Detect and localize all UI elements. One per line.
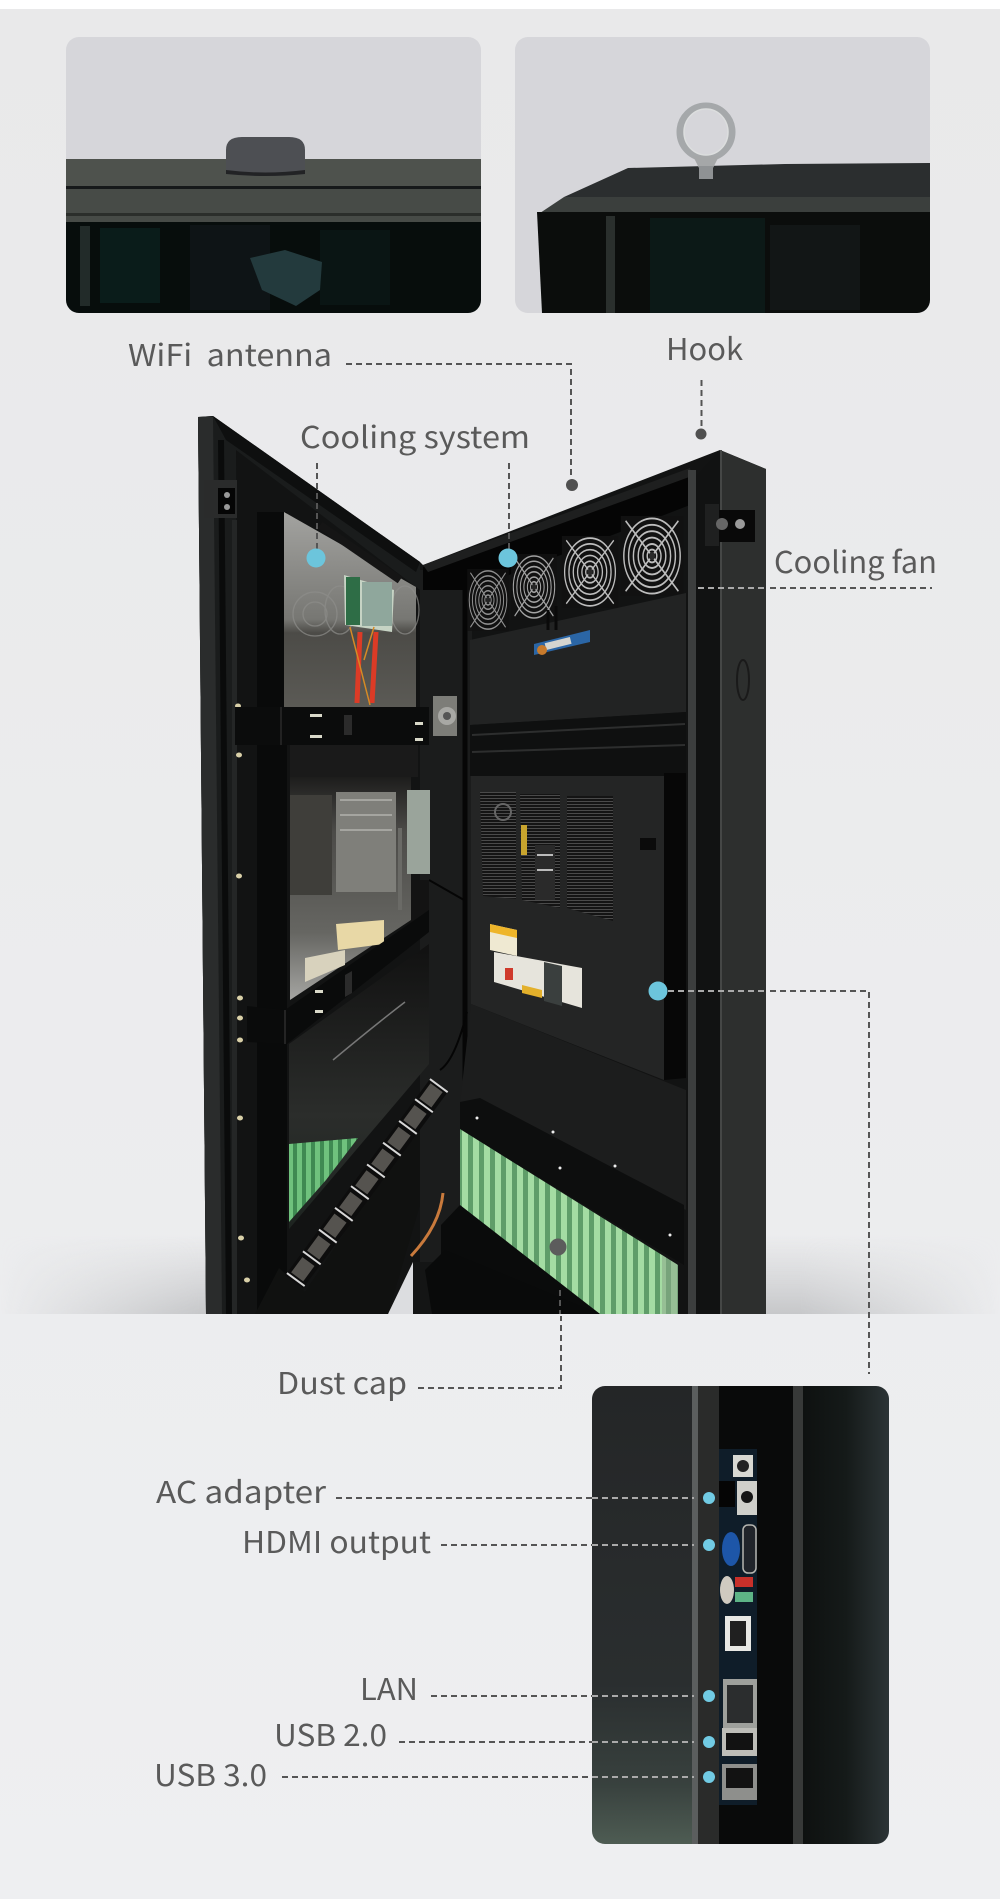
label: HDMI output: HDMI output xyxy=(242,1518,431,1562)
panel: lower door glass with filter reflection xyxy=(289,944,429,1229)
red wires xyxy=(357,632,376,703)
power supply vents xyxy=(480,792,613,921)
callout: cooling system markers xyxy=(306,463,518,568)
switch xyxy=(640,838,656,850)
label: Cooling system: Cooling system xyxy=(300,413,530,457)
label: AC adapter: AC adapter xyxy=(156,1468,326,1512)
label: USB 2.0: USB 2.0 xyxy=(274,1711,387,1755)
label: Hook: Hook xyxy=(666,325,743,369)
label: WiFi antenna xyxy=(128,331,578,491)
bottom lower box xyxy=(413,1262,441,1314)
panel: right interior xyxy=(411,468,692,1314)
panel: upper door glass with controller xyxy=(284,512,419,707)
photo: WiFi antenna closeup xyxy=(66,37,481,313)
label: USB 3.0 xyxy=(154,1751,715,1795)
label: Cooling fan: Cooling fan xyxy=(774,538,937,582)
controller board xyxy=(344,575,394,632)
label: LAN xyxy=(360,1665,715,1709)
right hinge xyxy=(705,504,755,546)
label: USB 3.0: USB 3.0 xyxy=(154,1751,267,1795)
callout: cooling fan leader xyxy=(698,587,932,589)
icon: antenna puck xyxy=(226,137,305,176)
fans xyxy=(467,516,683,631)
orange wire xyxy=(411,1193,443,1256)
door brackets xyxy=(235,707,429,1044)
panel: left door frame xyxy=(198,416,420,1314)
panel: center post xyxy=(420,570,472,1314)
door fan strip xyxy=(285,1078,448,1289)
upper cover panel xyxy=(470,593,686,725)
icon: lifting eye hook xyxy=(680,106,732,179)
lower interior xyxy=(460,1004,686,1210)
label: Dust cap xyxy=(277,1316,561,1403)
callout: dust cap marker xyxy=(550,1238,566,1314)
photo: hook closeup xyxy=(515,37,930,313)
door stay bracket xyxy=(433,696,457,736)
light gap below open door xyxy=(388,1262,413,1314)
cabinet photo xyxy=(198,416,766,1314)
label: AC adapter xyxy=(156,1468,715,1512)
label: LAN: LAN xyxy=(360,1665,418,1709)
filter frame xyxy=(460,1098,684,1209)
warning sticker xyxy=(490,924,517,956)
panel: middle door glass xyxy=(290,777,430,1000)
door rivets xyxy=(235,704,250,1282)
label: Hook xyxy=(666,325,743,440)
label: USB 2.0 xyxy=(274,1711,715,1755)
fan connector board xyxy=(534,606,590,655)
rail shelf xyxy=(470,725,472,776)
mainboard xyxy=(719,1449,757,1805)
photo: connector panel closeup xyxy=(592,1386,889,1844)
logo mark xyxy=(737,660,749,700)
label: Dust cap: Dust cap xyxy=(277,1359,407,1403)
door hinge xyxy=(214,480,237,518)
callout: connector panel leader xyxy=(648,982,869,1374)
label: WiFi antenna: WiFi antenna xyxy=(128,331,332,375)
cabinet silhouette xyxy=(198,416,766,1314)
air filter xyxy=(460,1129,678,1314)
background xyxy=(0,0,1000,1314)
breaker block xyxy=(494,952,582,1008)
top band of cabinet xyxy=(423,468,690,590)
reflected stickers xyxy=(336,920,384,950)
label: HDMI output xyxy=(242,1518,715,1562)
white module xyxy=(407,790,430,874)
power supply cover panel xyxy=(471,776,664,1080)
panel: right column xyxy=(688,450,766,1314)
door lower panel xyxy=(388,1313,389,1314)
